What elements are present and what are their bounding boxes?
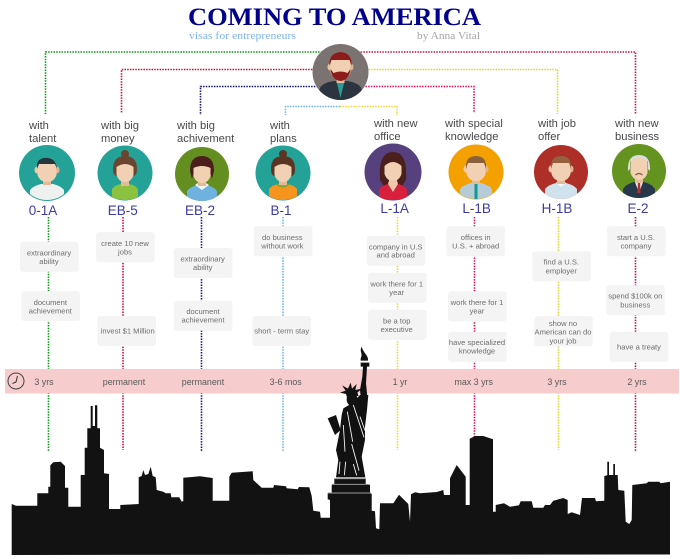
visa code: EB-2 [185, 203, 215, 218]
step: have specialized knowledge [448, 332, 507, 362]
durations: permanent [103, 377, 146, 387]
durations: 3 yrs [34, 377, 54, 387]
torch flame [361, 347, 368, 361]
city skyline silhouette [12, 405, 670, 555]
vertical requirement lines [48, 217, 636, 452]
column: O-1A [19, 120, 80, 321]
step: work there for 1 year: work there for 1 [369, 279, 423, 288]
label: with plans: plans [270, 133, 297, 145]
step: work there for 1 year: year [470, 307, 485, 316]
durations: 2 yrs [627, 377, 647, 387]
durations: 3-6 mos [270, 377, 302, 387]
step: start a U.S. company: company [621, 241, 652, 250]
step: show no American can do your job: American can do [535, 328, 591, 337]
step: document achievement: achievement [181, 316, 225, 325]
step: offices in U.S. + abroad [446, 226, 505, 256]
durations: 1 yr [393, 377, 407, 387]
step: work there for 1 year [368, 273, 427, 303]
label: with job offer: offer [538, 131, 560, 143]
label: with new office: office [374, 131, 401, 143]
robe folds [339, 405, 365, 475]
icon: avatar woman olive [175, 147, 229, 201]
step: create 10 new jobs: create 10 new [101, 239, 149, 248]
step: work there for 1 year: work there for 1 [450, 298, 503, 307]
visa code: L-1B [462, 201, 491, 216]
step: document achievement: achievement [29, 307, 73, 316]
icon: avatar man teal [19, 145, 75, 201]
robe [336, 395, 368, 477]
label: with special knowledge: knowledge [445, 131, 498, 143]
label: with plans: with [270, 120, 290, 132]
tablet [328, 415, 341, 435]
step: find a U.S. employer: find a U.S. [544, 258, 579, 267]
step: be a top executive: executive [381, 325, 413, 334]
step: find a U.S. employer [532, 251, 591, 281]
step: find a U.S. employer: employer [546, 266, 577, 275]
step: spend $100k on business: spend $100k on [608, 292, 662, 301]
head [347, 393, 357, 406]
step: company in U.S and abroad [367, 236, 425, 266]
label: with new business: business [615, 131, 660, 143]
icon: avatar man red [534, 145, 588, 199]
step: be a top executive [368, 310, 427, 340]
icon: avatar man orange [448, 144, 504, 200]
step: spend $100k on business: business [620, 300, 650, 309]
step: short-term stay: short - term stay [254, 327, 309, 336]
byline: by Anna Vital [417, 30, 480, 42]
label: with special knowledge: with special [445, 118, 503, 130]
visa code: EB-5 [108, 203, 138, 218]
column: B-1 [252, 120, 312, 346]
icon: clock [8, 373, 24, 389]
label: with job offer: with job [538, 118, 576, 130]
step: have a treaty [610, 332, 668, 362]
subtitle: visas for entrepreneurs [189, 30, 296, 42]
label: with talent: talent [29, 133, 57, 145]
column: EB-5 [96, 120, 156, 346]
step: have specialized knowledge: knowledge [459, 347, 495, 356]
step: offices in U.S. + abroad: U.S. + abroad [452, 241, 499, 250]
step: start a U.S. company [607, 226, 666, 256]
visa code: L-1A [380, 201, 409, 216]
step: create 10 new jobs [96, 232, 155, 262]
icon: avatar woman teal [98, 146, 152, 200]
durations: max 3 yrs [454, 377, 493, 387]
column: E-2 [606, 118, 668, 362]
step: be a top executive: be a top [383, 316, 410, 325]
step: extraordinary ability [174, 248, 232, 278]
step: company in U.S and abroad: company in U.S [369, 242, 423, 251]
step: document achievement [174, 301, 232, 331]
step: extraordinary ability: extraordinary [181, 255, 225, 264]
visa code: E-2 [627, 201, 649, 216]
step: extraordinary ability: ability [39, 257, 59, 266]
step: show no American can do your job [534, 316, 593, 346]
label: with big achivement: achivement [177, 133, 235, 145]
step: invest $1 Million [97, 316, 156, 346]
step: offices in U.S. + abroad: offices in [461, 233, 491, 242]
icon: founder avatar [312, 44, 368, 100]
step: create 10 new jobs: jobs [117, 248, 132, 257]
step: start a U.S. company: start a U.S. [617, 233, 655, 242]
step: extraordinary ability: extraordinary [27, 248, 71, 257]
label: with talent: with [29, 120, 49, 132]
step: spend $100k on business [606, 285, 665, 315]
connector lines from founder to visa columns [46, 52, 636, 115]
visa code: 0-1A [29, 203, 57, 218]
label: with big money: money [101, 133, 135, 145]
column: L-1A [364, 118, 427, 340]
label: with new office: with new [374, 118, 418, 130]
step: company in U.S and abroad: and abroad [376, 251, 415, 260]
step: document achievement: document [186, 307, 221, 316]
statue of liberty [328, 347, 371, 493]
step: work there for 1 year: year [389, 288, 405, 297]
step: invest $1 Million: invest $1 Million [101, 327, 155, 336]
icon: avatar woman purple [364, 144, 422, 200]
column: L-1B [444, 118, 507, 362]
step: have a treaty: have a treaty [617, 342, 661, 351]
step: show no American can do your job: your job [549, 336, 577, 345]
durations: permanent [182, 377, 225, 387]
step: extraordinary ability: ability [193, 263, 213, 272]
step: document achievement [21, 291, 80, 321]
durations [34, 377, 647, 387]
column: H-1B [532, 118, 593, 346]
step: show no American can do your job: show no [549, 319, 577, 328]
step: do business without work [254, 226, 312, 256]
step: short-term stay [252, 316, 311, 346]
step: document achievement: document [34, 298, 68, 307]
step: work there for 1 year [448, 291, 507, 321]
step: extraordinary ability [20, 242, 79, 272]
icon: avatar older man olive [612, 144, 666, 198]
step: do business without work: without work [260, 241, 304, 250]
torch handle and raised arm [360, 363, 369, 397]
visa code: B-1 [270, 203, 292, 218]
column: EB-2 [174, 120, 235, 331]
crown spikes [340, 383, 362, 397]
duration band [5, 369, 679, 394]
step: do business without work: do business [262, 233, 303, 242]
durations: 3 yrs [547, 377, 567, 387]
icon: avatar woman teal orange shirt [256, 146, 310, 200]
title: COMING TO AMERICA [188, 4, 481, 31]
pedestal highlights [328, 479, 371, 493]
label: with big money: with big [101, 120, 139, 132]
step: have specialized knowledge: have specialized [449, 338, 505, 347]
visa code: H-1B [542, 201, 572, 216]
label: with new business: with new [615, 118, 659, 130]
label: with big achivement: with big [177, 120, 215, 132]
